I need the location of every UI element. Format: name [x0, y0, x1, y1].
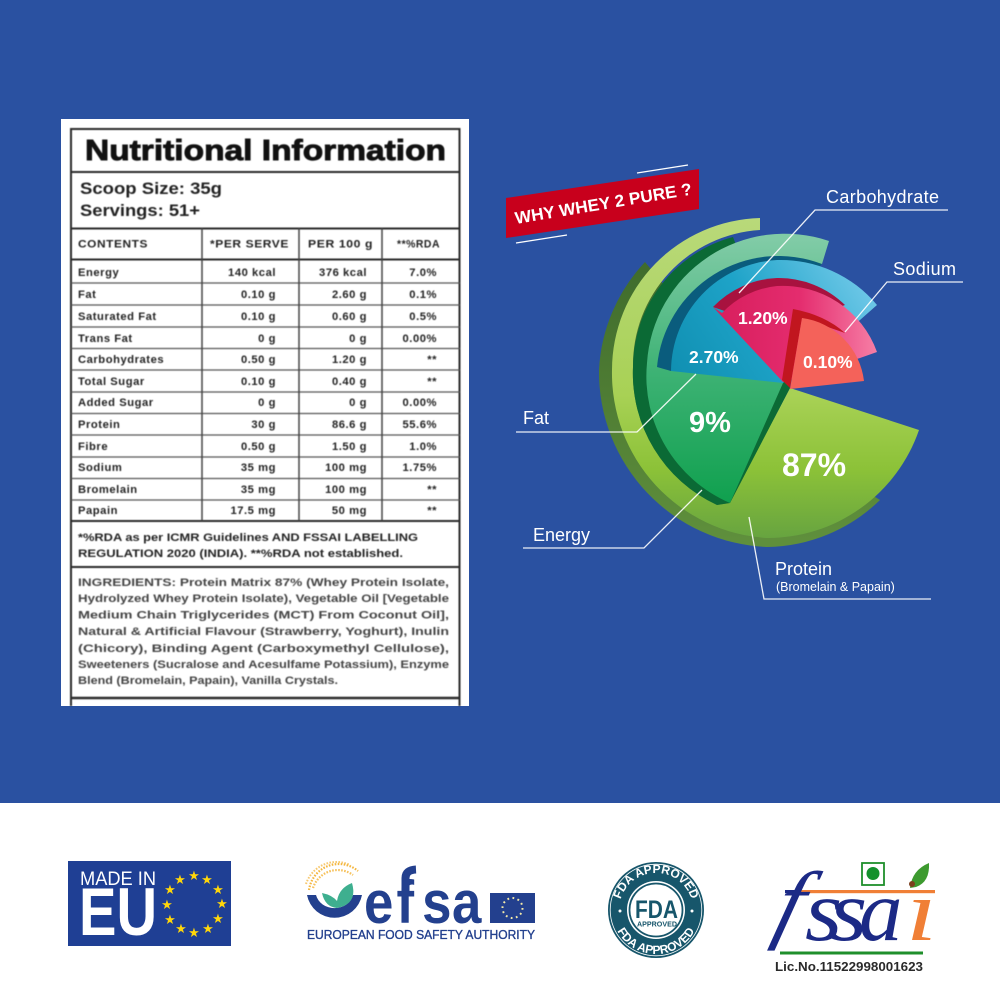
nutrition table: Total Sugar — [78, 376, 145, 388]
ingredients text: Sweeteners (Sucralose and Acesulfame Potassium), Enzyme — [78, 659, 449, 671]
nutrition table: **%RDA — [397, 238, 440, 250]
label: fat: Fat — [523, 408, 549, 428]
nutrition table: 0.00% — [403, 333, 437, 345]
logo: made in EU: ★ — [202, 922, 214, 937]
nutrition table: Bromelain — [78, 484, 138, 496]
logo: EFSA: EUROPEAN FOOD SAFETY AUTHORITY — [307, 928, 536, 942]
logo: made in EU: MADE IN — [80, 869, 156, 890]
label: protein: (Bromelain & Papain) — [776, 580, 895, 594]
nutrition table: Fat — [78, 289, 96, 301]
logo: made in EU: ★ — [174, 873, 186, 888]
logo: FSSAI: Lic.No.11522998001623 — [775, 960, 923, 974]
logo: made in EU: ★ — [164, 883, 176, 898]
logo: FSSAI — [766, 854, 937, 974]
label: protein — [749, 517, 931, 599]
logo: made in EU: ★ — [201, 873, 213, 888]
ingredients text: Natural & Artificial Flavour (Strawberry, Yoghurt), Inulin — [78, 626, 449, 638]
value: 2.70%: 2.70% — [689, 347, 739, 367]
value: 9%: 9% — [689, 407, 731, 439]
nutrition table: 0 g — [349, 397, 367, 409]
label: carbohydrate — [739, 187, 948, 293]
scoop size and servings: Servings: 51+ — [80, 201, 200, 220]
logo: FDA approved seal: FDA APPROVED — [613, 864, 698, 899]
nutrition table: 0.00% — [403, 397, 437, 409]
nutrition table: *PER SERVE — [210, 238, 289, 250]
slice: fat — [657, 256, 877, 383]
label: energy — [523, 490, 702, 548]
RDA footnote: *%RDA as per ICMR Guidelines AND FSSAI LABELLING — [78, 532, 418, 544]
pie chart — [599, 218, 919, 547]
ingredients text: Medium Chain Triglycerides (MCT) From Coconut Oil], — [78, 610, 449, 622]
nutrition table: 0.10 g — [241, 311, 276, 323]
nutrition table: PER 100 g — [308, 238, 373, 250]
nutrition table: 35 mg — [241, 484, 276, 496]
nutrition table: 1.75% — [403, 462, 437, 474]
ingredients text — [78, 577, 449, 687]
nutrition table: 0 g — [258, 333, 276, 345]
nutrition table: ** — [427, 484, 437, 496]
logo: made in EU: ★ — [161, 898, 173, 913]
nutrition table: Papain — [78, 505, 118, 517]
logo: FSSAI: ı — [906, 862, 937, 959]
label: carbohydrate: Carbohydrate — [826, 187, 939, 207]
label: protein: Protein — [775, 559, 832, 579]
label: energy: Energy — [533, 525, 590, 545]
label: sodium — [845, 259, 963, 332]
nutrition table: 0.10 g — [241, 289, 276, 301]
nutrition table: 30 g — [251, 419, 276, 431]
nutrition table: Fibre — [78, 441, 108, 453]
nutrition table: CONTENTS — [78, 238, 148, 250]
nutrition table: ** — [427, 354, 437, 366]
ingredients text: Blend (Bromelain, Papain), Vanilla Crystals. — [78, 675, 338, 687]
white footer band — [0, 803, 1000, 1000]
ingredients text: (Chicory), Binding Agent (Carboxymethyl Cellulose), — [78, 643, 449, 655]
logo: made in EU: ★ — [188, 869, 200, 884]
nutrition table: 376 kcal — [319, 267, 367, 279]
value: 1.20%: 1.20% — [738, 308, 788, 328]
scoop size and servings — [80, 179, 222, 220]
nutrition table: 55.6% — [403, 419, 437, 431]
nutrition table: 1.20 g — [332, 354, 367, 366]
nutrition table: Sodium — [78, 462, 122, 474]
logo: FSSAI: s — [830, 863, 867, 959]
scoop size and servings: Scoop Size: 35g — [80, 179, 222, 198]
slice: sodium — [782, 309, 864, 389]
slice: carbohydrate — [713, 278, 877, 382]
nutrition table: 0.1% — [409, 289, 437, 301]
nutrition table: Saturated Fat — [78, 311, 157, 323]
nutrition table: 0 g — [349, 333, 367, 345]
nutrition table: Protein — [78, 419, 120, 431]
nutrition table: 0.50 g — [241, 441, 276, 453]
nutrition table: 17.5 mg — [230, 505, 276, 517]
nutrition table: 0.5% — [409, 311, 437, 323]
nutrition table: ** — [427, 376, 437, 388]
nutrition table — [78, 238, 440, 517]
nutrition table: 86.6 g — [332, 419, 367, 431]
nutrition table: 7.0% — [409, 267, 437, 279]
nutrition table: Trans Fat — [78, 333, 133, 345]
logo: FDA approved seal: FDA — [635, 896, 678, 924]
nutrition table: 100 mg — [325, 462, 367, 474]
logo: FSSAI: a — [859, 862, 902, 959]
nutrition table: 0.40 g — [332, 376, 367, 388]
logo: FDA approved seal: FDA APPROVED — [618, 927, 694, 954]
logo: made in EU: ★ — [212, 912, 224, 927]
logo: made in EU: ★ — [164, 913, 176, 928]
nutrition table: 0.60 g — [332, 311, 367, 323]
RDA footnote — [78, 532, 418, 560]
nutrition table: 0 g — [258, 397, 276, 409]
ingredients text: Hydrolyzed Whey Protein Isolate), Vegetable Oil [Vegetable — [78, 593, 449, 605]
logo: EFSA: efsa — [364, 869, 482, 936]
ribbon: why whey 2 pure — [506, 165, 699, 243]
nutrition table: 1.0% — [409, 441, 437, 453]
heading: Nutritional Information: Nutritional Information — [85, 135, 446, 167]
logo: made in EU: EU — [79, 874, 157, 950]
panel: nutritional information label — [61, 119, 469, 706]
nutrition table: ** — [427, 505, 437, 517]
nutrition table: 0.50 g — [241, 354, 276, 366]
label: sodium: Sodium — [893, 259, 956, 279]
logo: FSSAI: f — [766, 854, 828, 951]
logo: FDA approved seal: APPROVED — [637, 920, 678, 928]
logo: made in EU: ★ — [175, 922, 187, 937]
nutrition table: 1.50 g — [332, 441, 367, 453]
nutrition table: 0.10 g — [241, 376, 276, 388]
nutrition table: 35 mg — [241, 462, 276, 474]
logo: made in EU — [68, 861, 231, 950]
slice: protein — [599, 218, 919, 547]
value: 87%: 87% — [782, 447, 846, 483]
logo: made in EU: ★ — [216, 897, 228, 912]
nutrition table: 100 mg — [325, 484, 367, 496]
logo: FDA approved seal — [608, 862, 704, 958]
logo: made in EU: ★ — [188, 926, 200, 941]
ingredients text: INGREDIENTS: Protein Matrix 87% (Whey Protein Isolate, — [78, 577, 449, 589]
nutrition table: 140 kcal — [228, 267, 276, 279]
logo: made in EU: ★ — [212, 883, 224, 898]
logo: FSSAI: s — [805, 863, 842, 959]
RDA footnote: REGULATION 2020 (INDIA). **%RDA not established. — [78, 548, 403, 560]
ribbon: why whey 2 pure: WHY WHEY 2 PURE ? — [514, 180, 693, 228]
nutrition table: Added Sugar — [78, 397, 154, 409]
nutrition table: Energy — [78, 267, 119, 279]
label: fat — [516, 374, 696, 432]
nutrition table: 50 mg — [332, 505, 367, 517]
nutrition table: 2.60 g — [332, 289, 367, 301]
logo: EFSA — [306, 862, 536, 942]
nutrition table: Carbohydrates — [78, 354, 164, 366]
slice: energy — [633, 234, 829, 505]
value: 0.10%: 0.10% — [803, 352, 853, 372]
